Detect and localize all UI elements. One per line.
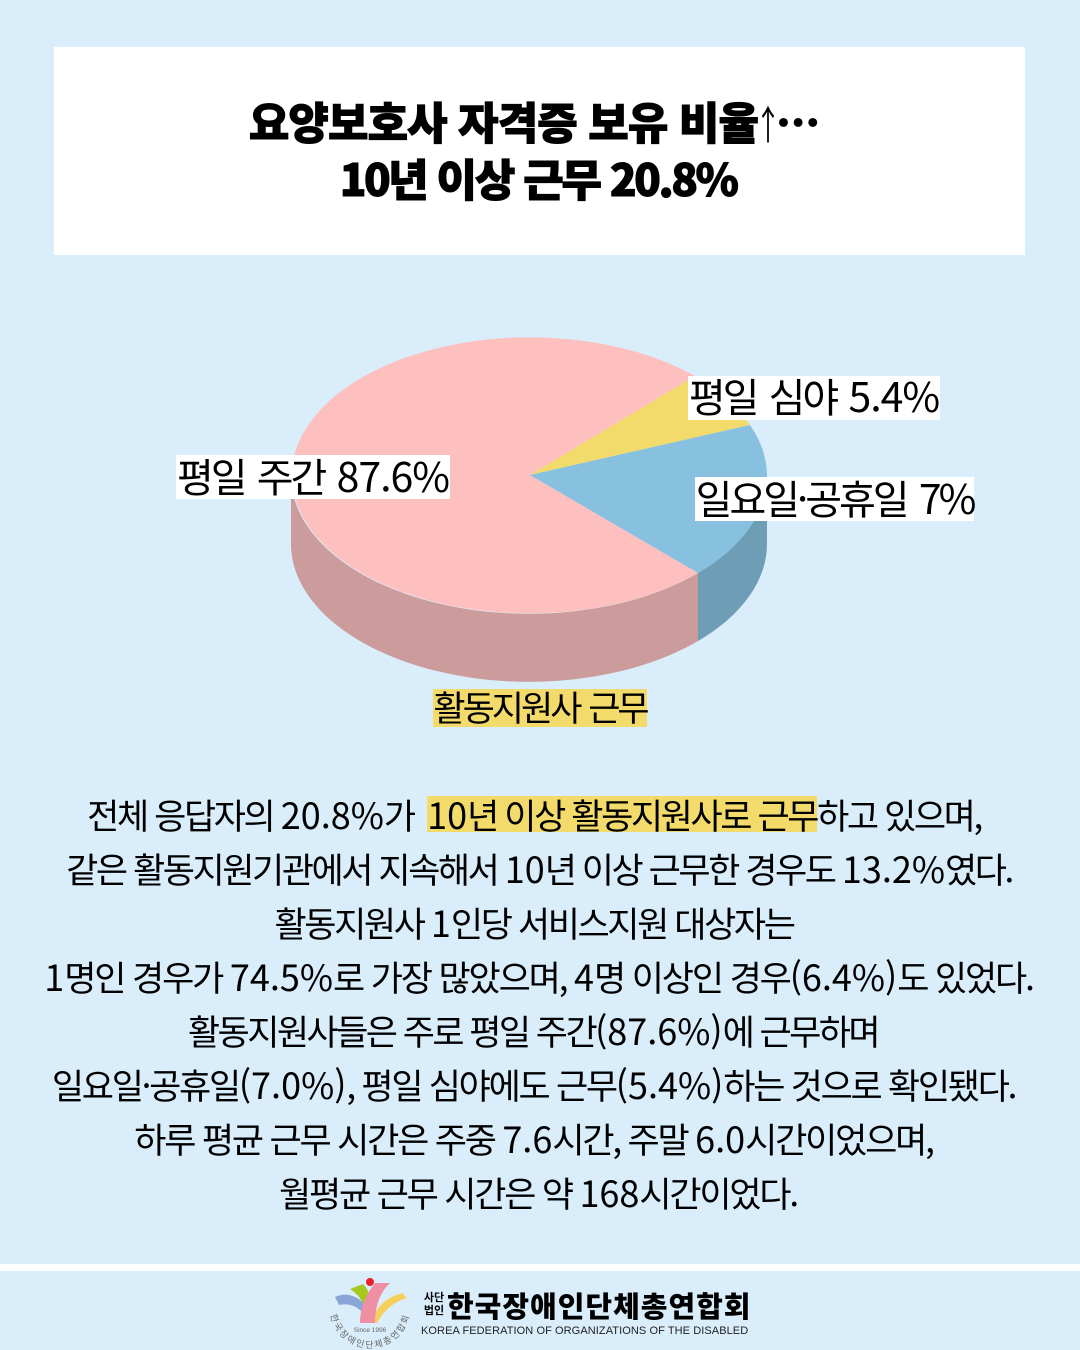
logo emblem [335,1278,407,1323]
footer organisation name: 법인 [424,1302,444,1318]
footer organisation name: 사단 [424,1289,444,1305]
body text: 하루 평균 근무 시간은 주중 7.6시간, 주말 6.0시간이었으며, [134,1112,933,1164]
body text: 1명인 경우가 74.5%로 가장 많았으며, 4명 이상인 경우(6.4%)도 있었다. [44,950,1033,1002]
slice: sunday and holiday [530,425,767,573]
body text: 같은 활동지원기관에서 지속해서 10년 이상 근무한 경우도 13.2%였다. [66,842,1012,894]
body text: 일요일·공휴일(7.0%), 평일 심야에도 근무(5.4%)하는 것으로 확인됐다. [52,1058,1015,1110]
pie chart [291,337,767,682]
chart caption: 활동지원사 근무 [433,681,647,732]
title panel [54,47,1025,255]
footer divider [0,1264,1080,1271]
footer logo [330,1278,410,1348]
body text: 10년 이상 활동지원사로 근무 [427,788,817,840]
pie side: blue [698,475,767,641]
title: 10년 이상 근무 20.8% [340,145,736,209]
footer organisation name: KOREA FEDERATION OF ORGANIZATIONS OF THE DISABLED [421,1325,748,1337]
title [249,88,819,209]
body text: 월평균 근무 시간은 약 168시간이었다. [279,1166,797,1218]
pie side: pink [291,475,698,682]
body text: 활동지원사들은 주로 평일 주간(87.6%)에 근무하며 [188,1004,878,1056]
logo seal text: 한국장애인단체총연합회 [330,1314,410,1348]
title: 요양보호사 자격증 보유 비율 … [249,88,819,152]
label: sunday and holiday: 일요일·공휴일 7% [696,466,973,526]
label: weekday late night: 평일 심야 5.4% [689,364,939,424]
label: weekday daytime: 평일 주간 87.6% [177,444,449,504]
body text [44,788,1033,1218]
title: ↑ [755,93,781,151]
body text: 전체 응답자의 20.8%가 하고 있으며, [87,788,981,840]
slice: weekday daytime [292,337,698,613]
body text: 활동지원사 1인당 서비스지원 대상자는 [274,896,794,948]
logo seal text: Since 1996 [354,1327,387,1334]
slice: weekday late night [530,376,750,475]
footer organisation name: 한국장애인단체총연합회 [447,1284,751,1326]
